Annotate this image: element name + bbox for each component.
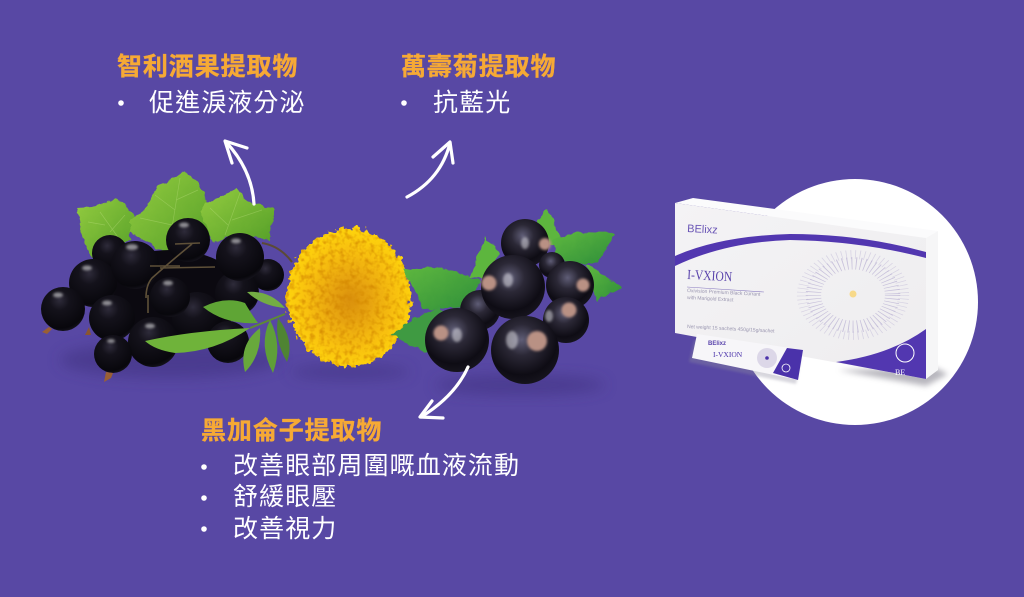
illustration: marigold flower [287, 228, 411, 380]
benefit list: 黑加侖子: 改善眼部周圍嘅血液流動 [233, 452, 520, 480]
arrow: to 黑加侖子 [420, 367, 468, 418]
product: I-VXION box: I-VXION [687, 268, 733, 285]
arrow: to 萬壽菊 [407, 142, 453, 197]
benefit list: 萬壽菊: 抗藍光 [433, 89, 511, 117]
illustration: chilean wineberry cluster [41, 172, 292, 382]
arrow: to 智利酒果 [225, 141, 254, 204]
product: sachet: I-VXION [713, 350, 743, 359]
benefit list: 智利酒果: 促進淚液分泌 [149, 89, 306, 117]
benefit list: 黑加侖子: 改善視力 [233, 515, 337, 543]
benefit list: 黑加侖子 [201, 452, 520, 543]
product: white circle backdrop [732, 179, 978, 425]
product: I-VXION box: with Marigold Extract [687, 295, 734, 303]
product: sachet [689, 334, 803, 384]
product: I-VXION box: Net weight 15 sachets 450g/15g/sachet [687, 324, 775, 335]
illustration: blackcurrant cluster [392, 208, 623, 395]
product: sachet: BElixz [708, 341, 726, 347]
product: I-VXION box: Oxivision Premium Black Currant [687, 288, 761, 298]
heading: 萬壽菊提取物: 萬壽菊提取物 [401, 53, 556, 81]
heading: 智利酒果提取物: 智利酒果提取物 [117, 53, 298, 81]
benefit list: 黑加侖子: 舒緩眼壓 [233, 483, 337, 511]
heading: 黑加侖子提取物: 黑加侖子提取物 [201, 416, 382, 445]
product: I-VXION box [675, 198, 948, 386]
product: I-VXION box: BElixz [687, 223, 718, 237]
product: I-VXION box: BE [895, 368, 905, 377]
